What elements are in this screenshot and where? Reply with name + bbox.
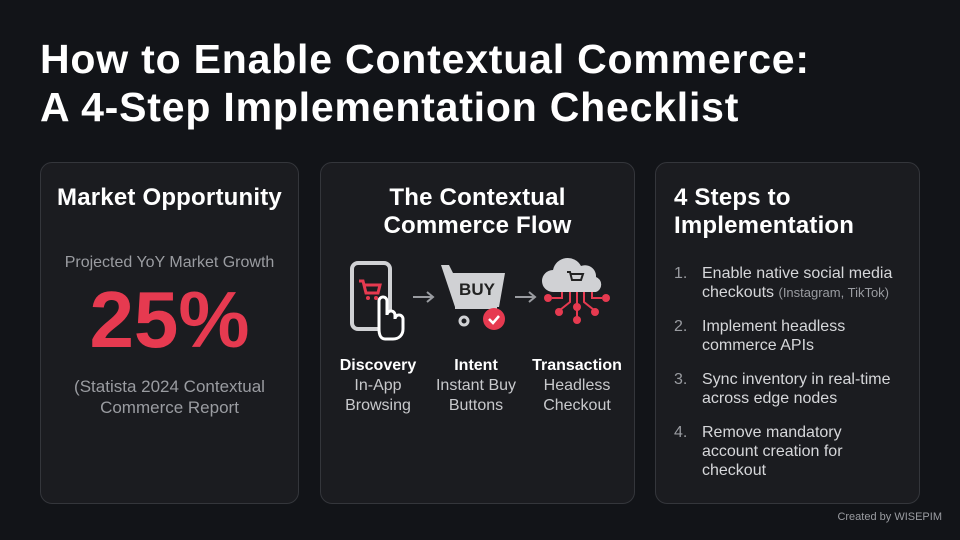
panel: 4 steps (655, 162, 920, 504)
heading: 4 Steps to (674, 184, 791, 211)
panel: flow: Headless (544, 377, 610, 394)
big stat: 25% (89, 275, 250, 364)
panel: flow: Buttons (449, 397, 503, 414)
icon: cloud network (542, 258, 610, 324)
step labels: In-App (354, 377, 402, 394)
panel: flow: Intent (454, 357, 498, 374)
icon: phone (352, 263, 403, 339)
arrow (515, 292, 535, 302)
source: (Statista 2024 Contextual (74, 377, 265, 396)
step labels: Discovery (340, 357, 416, 374)
steps list: 4. (674, 424, 687, 441)
arrow (413, 292, 433, 302)
flow icons (350, 258, 610, 340)
source: Commerce Report (100, 398, 239, 417)
steps list (674, 265, 892, 479)
title (40, 36, 810, 130)
steps list: 3. (674, 371, 687, 388)
heading: Market Opportunity (57, 184, 282, 211)
steps list: Sync inventory in real-time across edge nodes (702, 371, 891, 407)
panel: flow: Checkout (543, 397, 611, 414)
heading: Commerce Flow (384, 212, 571, 239)
icon: buy cart: BUY (459, 280, 496, 299)
panel: flow: Instant Buy (436, 377, 516, 394)
steps list: 2. (674, 318, 687, 335)
heading: Implementation (674, 212, 854, 239)
icon: buy cart (441, 265, 505, 330)
heading: The Contextual (389, 184, 566, 211)
heading (384, 184, 572, 239)
step labels (340, 357, 416, 414)
title: How to Enable Contextual Commerce: (40, 36, 810, 82)
title: A 4-Step Implementation Checklist (40, 84, 739, 130)
source (74, 377, 265, 417)
steps list: Implement headless commerce APIs (702, 318, 845, 354)
step labels: Browsing (345, 397, 411, 414)
steps list: Enable native social media checkouts (Instagram, TikTok) (702, 265, 892, 301)
panel: flow (320, 162, 635, 504)
credit: Created by WISEPIM (837, 511, 942, 523)
panel: flow: Transaction (532, 357, 622, 374)
steps list: 1. (674, 265, 687, 282)
heading (674, 184, 854, 239)
steps list: Remove mandatory account creation for checkout (702, 424, 843, 479)
panel: market opportunity (40, 162, 299, 504)
subtitle: Projected YoY Market Growth (65, 254, 274, 271)
